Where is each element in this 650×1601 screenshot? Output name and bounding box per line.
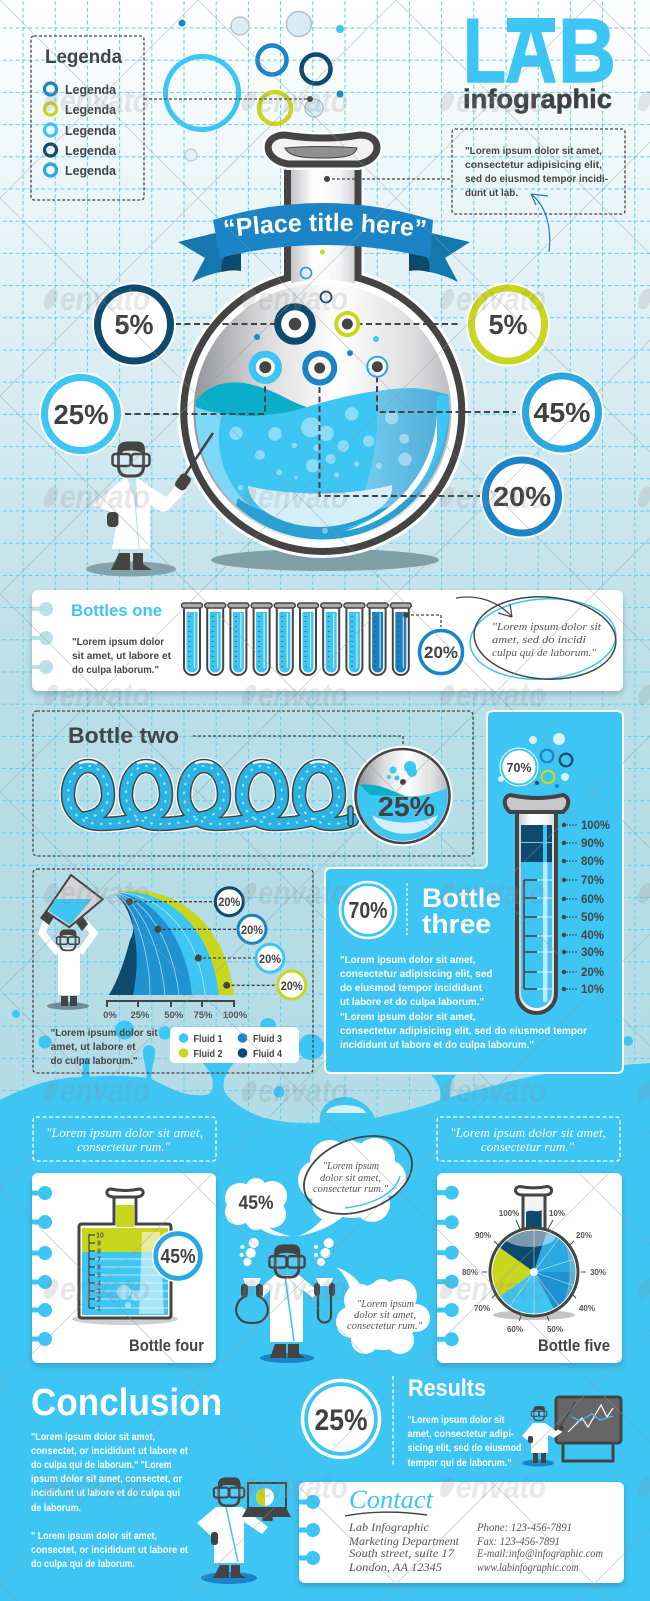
coiled tube <box>68 762 353 826</box>
title LAB infographic: B <box>558 1 616 102</box>
legend items: Legenda <box>65 82 117 97</box>
flask shadow <box>211 549 439 571</box>
bottle three text: consectetur adipisicing elit, sed <box>340 968 492 980</box>
tube scale: 70% <box>581 875 604 887</box>
chart callouts: 20% <box>259 952 281 966</box>
chart axis <box>103 1001 248 1021</box>
phone and web <box>476 1520 603 1574</box>
bottles one text: sit amet, ut labore et <box>72 650 171 662</box>
title LAB infographic: A <box>505 1 557 102</box>
results text: "Lorem ipsum dolor sit <box>408 1414 505 1426</box>
cloud: bottom speech <box>336 1267 430 1354</box>
bottle three text: ut labore et do culpa laborum." <box>340 996 484 1008</box>
20 percent badge: 20% <box>424 643 458 662</box>
pie scale labels: 10% <box>549 1209 565 1218</box>
chart text: "Lorem ipsum dolor sit <box>51 1027 158 1039</box>
address <box>348 1520 460 1574</box>
chart text: do culpa laborum." <box>51 1055 138 1067</box>
punched holes <box>299 1496 320 1564</box>
pie scale labels: 80% <box>462 1268 478 1277</box>
text note, top right: sed do eiusmod tempor incidi- <box>465 173 608 185</box>
bottles one text: "Lorem ipsum dolor <box>72 636 164 648</box>
text note, top right: dunt ut lab. <box>465 187 518 199</box>
bubbles and 70 percent small badge: 70% <box>506 760 532 775</box>
bottle three text: consectetur adipisicing elit, sed do eiusmod tempor <box>340 1025 587 1037</box>
conclusion text: consectet, or incididunt ut labore et <box>31 1445 188 1457</box>
ribbon tails <box>178 233 241 282</box>
chart axis: 0% <box>103 1010 117 1021</box>
stat: 5 percent dark <box>92 282 176 366</box>
bottle three text: do eiusmod tempor incididunt <box>340 982 482 994</box>
ribbon title: “Place title here” <box>224 212 426 236</box>
pie scale labels: 40% <box>579 1304 595 1313</box>
legend items: Legenda <box>65 163 117 178</box>
address: Marketing Department <box>348 1534 460 1548</box>
stat: 25 percent: 25% <box>54 399 109 430</box>
address: Lab Infographic <box>348 1520 430 1534</box>
pie scale labels: 20% <box>576 1231 592 1240</box>
ribbon banner <box>178 203 470 282</box>
conclusion text: do culpa qui de laborum." "Lorem <box>31 1459 172 1471</box>
square bottle: 1 <box>97 1306 101 1312</box>
stat: 20 percent <box>480 454 564 538</box>
blue liquid area at the bottom <box>0 1063 650 1601</box>
main flask <box>184 135 462 551</box>
legend items: Legenda <box>65 143 117 158</box>
chart text: amet, ut labore et <box>51 1041 136 1053</box>
results heading: Results <box>408 1375 486 1402</box>
bottle five label: Bottle five <box>538 1336 610 1355</box>
cloud: bottom speech: consectetur rum." <box>347 1320 422 1332</box>
phone and web: Phone: 123-456-7891 <box>476 1520 572 1534</box>
phone and web: Fax: 123-456-7891 <box>476 1534 560 1548</box>
pie scale labels: 50% <box>547 1325 563 1334</box>
cloud: bottom speech: dolor sit amet, <box>354 1309 416 1321</box>
scientist with flasks <box>236 1238 335 1363</box>
square bottle: 5 <box>97 1272 101 1280</box>
punched holes <box>32 1186 52 1346</box>
sketch note: "Lorem ipsum dolor sit <box>492 621 602 633</box>
address: South street, suite 17 <box>349 1546 455 1560</box>
cloud: bottom speech: "Lorem ipsum <box>357 1298 414 1310</box>
conclusion text <box>31 1431 188 1570</box>
legend items: Legenda <box>65 123 117 138</box>
big test tube <box>505 795 568 1013</box>
stat: 5 percent yellow <box>466 282 550 366</box>
square bottle: 7 <box>97 1256 101 1264</box>
bottle two heading: Bottle two <box>68 723 179 748</box>
stat: 45 percent: 45% <box>534 397 591 428</box>
bottle four label: Bottle four <box>129 1336 204 1355</box>
pie scale labels: 60% <box>507 1325 523 1334</box>
tube scale: 10% <box>581 984 604 996</box>
70 percent badge <box>340 882 396 938</box>
pie scale labels: 100% <box>499 1209 519 1218</box>
bottle three text: incididunt ut labore et do culpa laborum." <box>340 1039 534 1051</box>
laptop <box>242 1483 291 1521</box>
round bottle 25 percent <box>350 748 455 850</box>
square bottle: 4 <box>97 1280 101 1288</box>
tube scale: 90% <box>581 838 604 850</box>
text note, top right: "Lorem ipsum dolor sit amet, <box>465 145 602 157</box>
pie scale labels: 90% <box>475 1231 491 1240</box>
sketch note <box>456 592 619 684</box>
20 percent badge <box>420 630 462 674</box>
fluid legend: Fluid 4 <box>253 1048 282 1060</box>
70 percent badge: 70% <box>348 897 388 923</box>
results text <box>408 1414 522 1469</box>
bottle three heading <box>422 883 501 939</box>
conclusion text: " Lorem ipsum dolor sit amet, <box>31 1530 157 1542</box>
legend items <box>44 82 117 178</box>
legend items: Legenda <box>65 102 117 117</box>
text note, top right: consectetur adipisicing elit, <box>465 159 602 171</box>
bottles one text <box>72 636 171 676</box>
results text: amet, consectetur adipi- <box>408 1428 514 1440</box>
legend panel <box>31 36 144 200</box>
bottle three text: "Lorem ipsum dolor sit amet, <box>340 1011 476 1023</box>
25 percent badge <box>302 1380 380 1458</box>
bottle three heading: three <box>422 909 491 939</box>
stat: 5 percent dark: 5% <box>114 309 154 340</box>
conclusion text: "Lorem ipsum dolor sit amet, <box>31 1431 155 1443</box>
conclusion text: consectet, or incididunt ut labore et <box>31 1544 188 1556</box>
bottle three text <box>340 954 587 1051</box>
conclusion heading: Conclusion <box>31 1382 222 1424</box>
square bottle: 9 <box>97 1240 101 1248</box>
quote box right: consectetur rum." <box>481 1139 575 1154</box>
conclusion text: de laborum. <box>31 1502 81 1514</box>
quote box right: "Lorem ipsum dolor sit amet, <box>450 1125 606 1140</box>
results text: tempor qui de laborum." <box>408 1457 512 1469</box>
liquid drops <box>12 1010 633 1113</box>
tube scale: 60% <box>581 894 604 906</box>
tube scale: 100% <box>581 820 610 832</box>
bottles one heading: Bottles one <box>71 601 162 620</box>
tube scale: 80% <box>581 856 604 868</box>
panel: contact <box>299 1482 624 1583</box>
chart axis: 75% <box>193 1010 213 1021</box>
stat: 20 percent: 20% <box>493 481 551 512</box>
bubbles above flask <box>144 12 344 161</box>
cloud: top speech: consectetur rum." <box>313 1183 388 1195</box>
panel: area chart <box>33 869 313 1073</box>
fluid legend: Fluid 1 <box>194 1033 223 1045</box>
panel: bottle two <box>33 711 473 856</box>
square bottle: 3 <box>97 1288 101 1296</box>
title LAB infographic: infographic <box>463 84 612 114</box>
stat: 25 percent <box>39 372 123 456</box>
dashed connectors <box>125 324 516 496</box>
cloud: top speech: dolor sit amet, <box>320 1172 381 1184</box>
blackboard chart <box>556 1397 621 1461</box>
punched holes <box>32 602 52 674</box>
bubbles and 70 percent small badge <box>498 733 572 788</box>
title LAB infographic <box>463 1 616 114</box>
quote box left: consectetur rum." <box>77 1139 171 1154</box>
square bottle: 8 <box>97 1248 101 1256</box>
cloud: top speech: "Lorem ipsum <box>323 1160 379 1172</box>
quote box left <box>33 1117 216 1161</box>
flask markers <box>249 307 387 384</box>
45 percent badge <box>152 1230 204 1282</box>
tube scale: 30% <box>581 947 604 959</box>
contact heading: Contact <box>349 1485 434 1514</box>
bottle three heading: Bottle <box>422 883 501 913</box>
25 percent badge: 25% <box>314 1404 368 1437</box>
scientist lifting beaker <box>40 875 103 1010</box>
flask liquid <box>190 382 452 545</box>
conclusion text: incididunt ut labore et do culpa qui <box>31 1487 180 1499</box>
chart callouts: 20% <box>218 895 241 909</box>
panel: bottle five <box>437 1173 622 1363</box>
quote box right <box>437 1117 620 1161</box>
results text: sicing elit, sed do eiusmod <box>408 1442 522 1454</box>
phone and web: E-mail:info@infographic.com <box>476 1546 603 1560</box>
quote box left: "Lorem ipsum dolor sit amet, <box>46 1125 203 1140</box>
neck note marker <box>324 176 452 182</box>
chart callouts: 20% <box>241 923 263 937</box>
curved area chart <box>109 890 234 995</box>
legend title: Legenda <box>45 47 122 68</box>
text note, top right <box>452 129 625 214</box>
punched holes <box>437 1186 458 1346</box>
pie flask <box>488 1185 580 1320</box>
conclusion text: do culpa qui de laborum. <box>31 1558 135 1570</box>
fluid legend <box>170 1027 299 1063</box>
bottle three text: "Lorem ipsum dolor sit amet, <box>340 954 476 966</box>
cloud: 45 percent <box>225 1178 290 1236</box>
fluid legend: Fluid 3 <box>253 1033 282 1045</box>
square bottle: 10 <box>96 1232 104 1240</box>
chart callouts <box>126 888 306 999</box>
round bottle 25 percent: 25% <box>378 791 435 822</box>
tube scale <box>562 820 610 996</box>
cloud: top speech <box>293 1122 423 1236</box>
cloud: 45 percent: 45% <box>238 1193 274 1214</box>
title LAB infographic: L <box>463 1 506 102</box>
panel: bottle four <box>32 1173 216 1363</box>
pie scale labels: 70% <box>474 1304 490 1313</box>
square bottle: 2 <box>97 1296 101 1304</box>
held flask <box>236 1278 268 1323</box>
tube scale: 50% <box>581 912 604 924</box>
square bottle: 6 <box>97 1264 101 1272</box>
tube scale: 40% <box>581 930 604 942</box>
flask outline <box>184 160 462 551</box>
bottles one text: do culpa laborum." <box>72 664 159 676</box>
small bubbles in flask <box>254 250 379 356</box>
address: London, AA 12345 <box>348 1560 442 1574</box>
square bottle <box>72 1189 178 1325</box>
tube scale: 20% <box>581 967 604 979</box>
fluid legend: Fluid 2 <box>194 1048 223 1060</box>
panel: bottles one <box>32 590 623 691</box>
white bubbles <box>240 1238 334 1266</box>
pie scale labels <box>462 1209 606 1334</box>
conclusion text: ipsum dolor sit amet, consectet, or <box>31 1473 182 1485</box>
panel: bottle three <box>325 711 623 1073</box>
stat: 5 percent yellow: 5% <box>488 309 528 340</box>
chart axis: 100% <box>223 1010 248 1021</box>
pie scale labels: 30% <box>590 1268 606 1277</box>
chart callouts: 20% <box>281 979 303 993</box>
scientist with laptop <box>197 1477 291 1584</box>
sketch note: amet, sed do incidi <box>492 634 586 646</box>
flask lip <box>268 135 377 164</box>
phone and web: www.labinfographic.com <box>477 1560 579 1574</box>
held tube <box>314 1278 335 1322</box>
sketch note: culpa qui de laborum." <box>492 647 596 659</box>
test tubes row <box>182 603 411 675</box>
chart axis: 25% <box>130 1010 150 1021</box>
stat: 45 percent <box>520 370 604 454</box>
scientist at board <box>522 1402 575 1466</box>
scientist with pointer <box>86 433 213 576</box>
chart axis: 50% <box>164 1010 184 1021</box>
arrow to note <box>531 194 550 252</box>
chart text <box>51 1027 158 1067</box>
flask glass <box>184 160 462 551</box>
45 percent badge: 45% <box>160 1246 196 1268</box>
